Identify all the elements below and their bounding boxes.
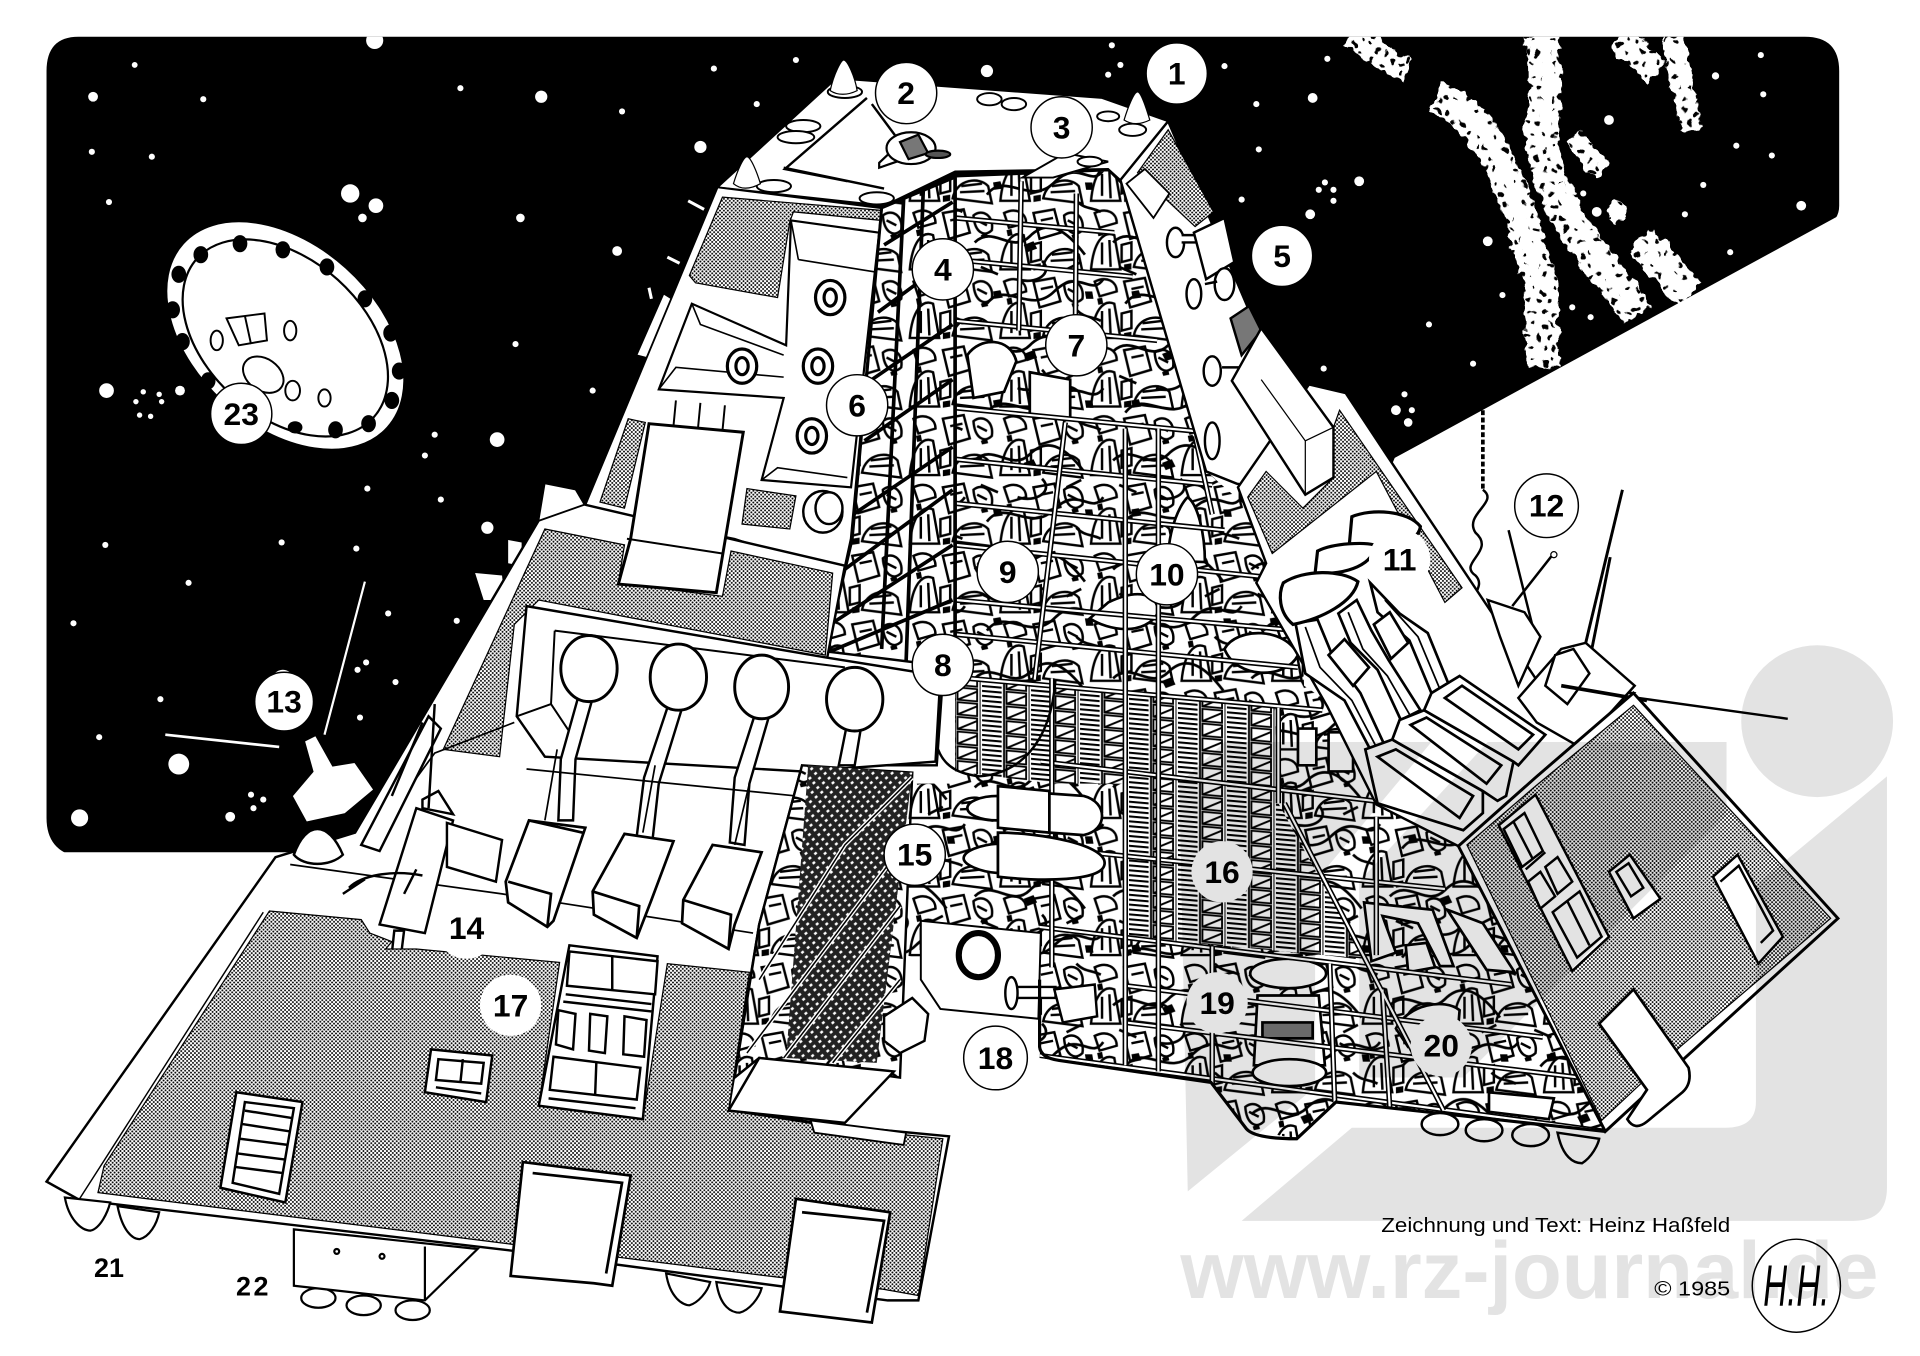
lower stipple strips <box>600 419 645 508</box>
inner recess lines <box>659 220 874 480</box>
right flap <box>1713 855 1783 964</box>
landing gear left <box>65 1198 762 1313</box>
right stipple strip <box>1138 130 1213 227</box>
tier stipple <box>443 529 833 757</box>
horizontal ribs <box>955 181 1605 1131</box>
middle tier and front deck <box>47 400 949 1322</box>
lever stems <box>558 698 861 845</box>
right tier stipple <box>1248 410 1462 602</box>
number text: 10 <box>1149 556 1185 592</box>
upper-right small hatch <box>811 1120 906 1145</box>
signature seal: H.H. <box>1763 1253 1829 1318</box>
number text: 8 <box>934 647 952 683</box>
number labels <box>211 43 1578 1090</box>
landing gear right <box>1422 1113 1599 1163</box>
upper stipple panel <box>689 197 884 298</box>
deck stipple panel <box>98 911 943 1296</box>
number text: 18 <box>978 1040 1013 1076</box>
lever boxes <box>506 820 762 949</box>
watermark: logo and site: www.rz-journal.de <box>1179 1226 1878 1316</box>
bottom-left white plate <box>729 1058 894 1123</box>
interior cutaway <box>894 159 1629 1151</box>
number text <box>94 55 1564 1302</box>
number text: 20 <box>1424 1028 1459 1064</box>
number text: 19 <box>1199 985 1235 1021</box>
machinery overlay <box>906 172 1590 1124</box>
seat head pods <box>1280 512 1420 624</box>
number text: 22 <box>236 1272 271 1302</box>
tower left face <box>584 187 884 576</box>
console column <box>539 945 658 1119</box>
keel outline <box>1040 980 1605 1139</box>
number text: 1 <box>1168 55 1186 91</box>
right console <box>1499 795 1609 971</box>
panel: black starfield <box>47 37 1839 857</box>
engine pods <box>964 786 1105 880</box>
number text: 14 <box>449 910 485 946</box>
lead pipe <box>931 680 1056 776</box>
T-shaped recess <box>659 220 879 487</box>
deck lines <box>290 722 796 933</box>
number text: 15 <box>897 837 932 873</box>
small porthole <box>803 491 842 533</box>
number text: 23 <box>224 396 259 432</box>
number text: 12 <box>1529 488 1564 524</box>
front edge line <box>80 912 263 1199</box>
right knobs <box>1167 218 1261 459</box>
large equipment <box>967 342 1554 1119</box>
lower-right cut of panel <box>1347 216 1839 857</box>
antennas right <box>1470 410 1788 719</box>
seat stems <box>1296 583 1450 749</box>
engine block 22 <box>294 1229 478 1320</box>
stars <box>70 32 1806 827</box>
lower-left cut of panel <box>47 852 294 980</box>
control stand <box>343 791 502 1037</box>
slide block <box>1232 328 1333 495</box>
right small window <box>1609 855 1660 918</box>
copyright: © 1985 <box>1654 1279 1730 1301</box>
number text: 9 <box>999 554 1017 590</box>
number text: 13 <box>266 684 302 720</box>
number text: 11 <box>1383 542 1416 578</box>
number text: 7 <box>1067 327 1085 363</box>
watermark: logo and site <box>1179 645 1893 1316</box>
tower block <box>618 424 743 593</box>
lower flap <box>1599 989 1690 1126</box>
grille <box>220 1092 302 1202</box>
dense cell grid <box>955 680 1364 959</box>
icon: flying saucer <box>123 176 448 495</box>
docking device <box>1005 977 1097 1022</box>
antenna mast <box>392 704 435 808</box>
lower lattice wall <box>735 765 912 1078</box>
sloped ramp <box>361 716 441 851</box>
tower top deck <box>718 60 1168 206</box>
egg pods <box>561 636 883 731</box>
console recess <box>517 606 940 771</box>
floor bay with ring <box>921 921 1041 1019</box>
credit text: Zeichnung und Text: Heinz Haßfeld <box>1381 1215 1730 1237</box>
signature seal <box>1752 1239 1840 1332</box>
antenna wires on black <box>165 201 704 747</box>
back-side hull bits <box>475 540 522 600</box>
number text: 16 <box>1204 854 1240 890</box>
right tier and seats <box>1232 328 1633 846</box>
right tower panel <box>1120 121 1335 495</box>
number text: 4 <box>934 251 952 287</box>
astronaut figure <box>884 998 928 1053</box>
number text: 2 <box>897 75 915 111</box>
number text: 5 <box>1273 238 1291 274</box>
number text: 21 <box>94 1253 124 1283</box>
left tower lattice wall <box>827 178 955 673</box>
hatch knobs <box>727 280 845 453</box>
right tower window <box>1127 169 1169 218</box>
right stipple panel <box>1458 693 1838 1131</box>
machinery fill <box>894 159 1629 1151</box>
turret base and cone <box>291 735 375 864</box>
corner turret right <box>1488 600 1647 747</box>
galaxy streaks <box>1353 34 1692 367</box>
number text: 6 <box>848 387 866 423</box>
small window <box>425 1049 492 1102</box>
hull filler behind console <box>637 294 1239 790</box>
number text: 17 <box>493 987 528 1023</box>
deck flaps <box>511 1162 890 1322</box>
number text: 3 <box>1053 109 1070 145</box>
seat boxes <box>1365 676 1545 830</box>
